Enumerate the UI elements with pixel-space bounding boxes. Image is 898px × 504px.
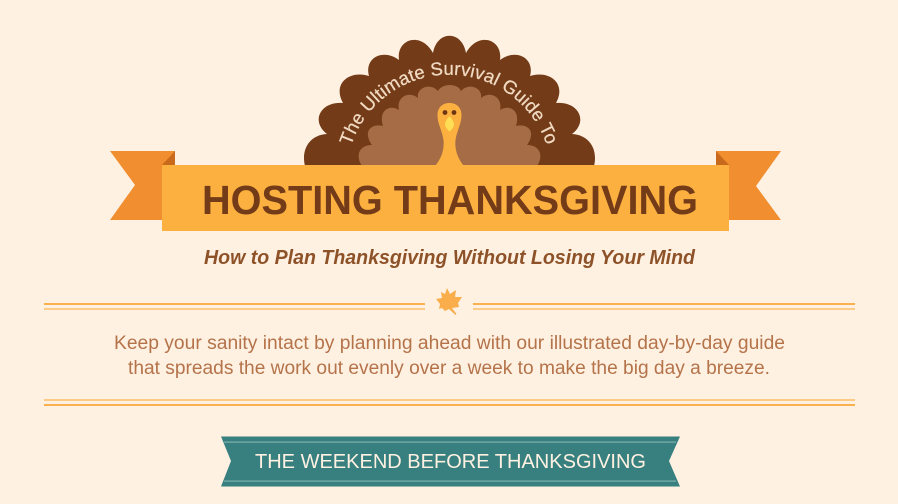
upper divider	[44, 303, 855, 310]
icon: maple leaf	[436, 288, 462, 315]
right ribbon tail	[716, 151, 781, 220]
turkey inner tail feathers	[359, 85, 540, 166]
intro paragraph: Keep your sanity intact by planning ahead with our illustrated day-by-day guide	[114, 333, 785, 354]
turkey outer tail feathers	[304, 36, 595, 166]
right ribbon fold	[716, 151, 729, 165]
turkey eyes	[443, 110, 456, 115]
intro paragraph: that spreads the work out evenly over a week to make the big day a breeze.	[128, 358, 770, 379]
left ribbon fold	[162, 151, 175, 165]
turkey beak	[445, 116, 454, 132]
intro paragraph	[114, 333, 785, 379]
section banner	[221, 436, 680, 486]
curved heading: The Ultimate Survival Guide To	[339, 62, 556, 144]
subtitle: How to Plan Thanksgiving Without Losing Your Mind	[204, 247, 696, 269]
section heading: THE WEEKEND BEFORE THANKSGIVING	[255, 451, 646, 473]
left ribbon tail	[110, 151, 175, 220]
title banner	[162, 165, 729, 231]
turkey neck and head	[435, 103, 464, 166]
turkey illustration	[304, 36, 595, 166]
lower divider	[44, 399, 855, 406]
title: HOSTING THANKSGIVING	[202, 177, 698, 223]
